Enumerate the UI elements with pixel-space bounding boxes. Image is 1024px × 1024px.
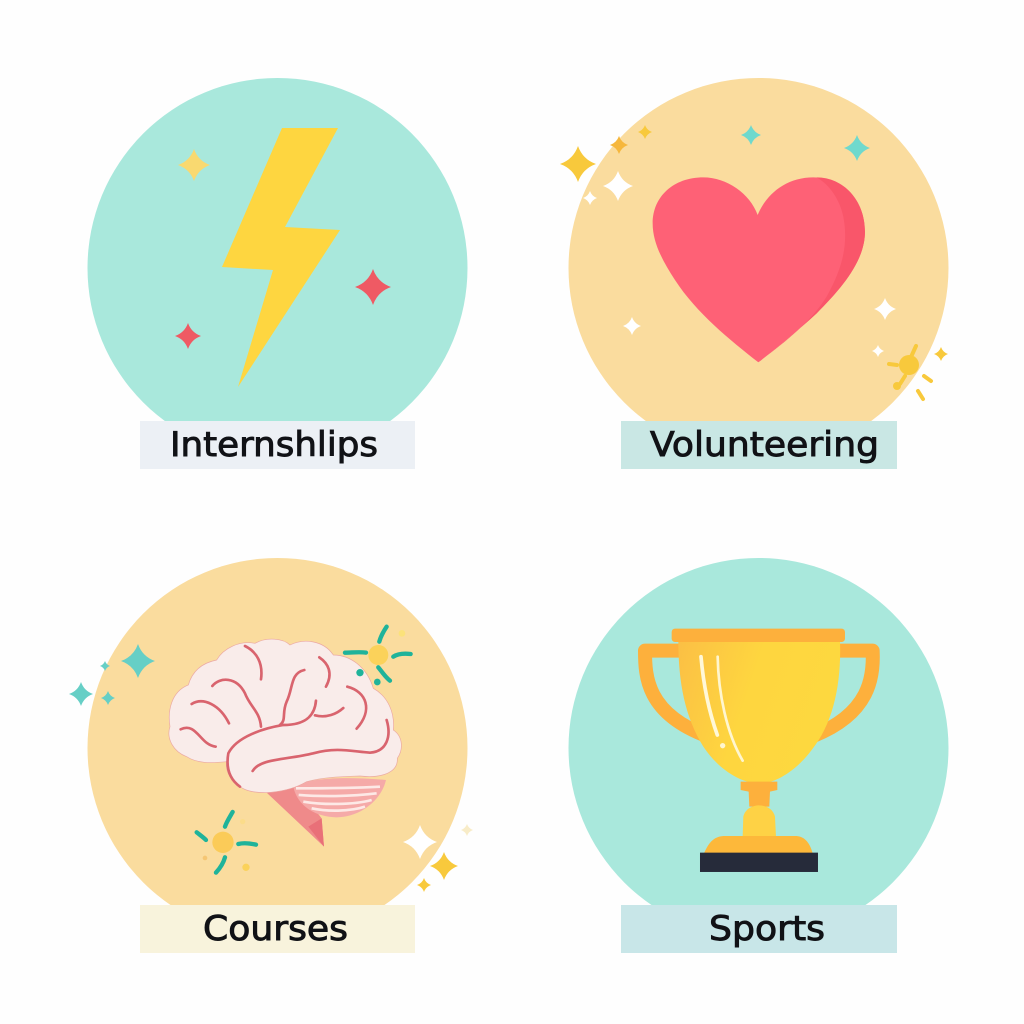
label: internships [140, 421, 415, 469]
panel: courses [69, 558, 473, 953]
panel: internships [88, 78, 468, 469]
trophy rim [672, 629, 845, 642]
icon: teal sparkles [69, 644, 155, 706]
icon: white sparkle [403, 825, 437, 859]
cup highlights [701, 657, 717, 735]
icon: large red sparkle [355, 269, 391, 305]
circle: internships background [88, 78, 468, 458]
icon: yellow sparkle [178, 149, 210, 181]
icon: upper neuron burst [345, 627, 411, 685]
label: volunteering [621, 421, 897, 469]
circle: sports background [568, 558, 948, 938]
trophy stem [741, 782, 777, 807]
panel: sports [568, 558, 948, 953]
icon: teal sparkles [741, 125, 870, 161]
folds [181, 646, 388, 787]
icon: gold burst [889, 346, 931, 399]
icon: small red sparkle [175, 323, 201, 349]
label: courses [140, 905, 415, 953]
trophy cup [678, 640, 840, 784]
circle: volunteering background [568, 78, 948, 458]
icon: lightning bolt [222, 128, 340, 387]
label: internships: Internshlips [170, 425, 378, 464]
label: sports: Sports [709, 909, 825, 948]
icon: white sparkles [583, 171, 896, 357]
icon: trophy [645, 629, 873, 872]
brain stem [267, 787, 324, 847]
trophy base [704, 836, 813, 853]
label: volunteering: Volunteering [650, 425, 879, 464]
label: sports [621, 905, 897, 953]
icon: gold sparkles [417, 824, 473, 892]
icon: lower neuron burst [197, 812, 256, 873]
icon: heart [653, 177, 865, 362]
label: courses: Courses [203, 909, 348, 948]
icon: gold sparkles [560, 125, 948, 361]
cerebrum [169, 639, 401, 793]
trophy handles [645, 651, 707, 736]
circle: courses background [88, 558, 468, 938]
panel: volunteering [560, 78, 948, 469]
icon: brain [169, 639, 401, 847]
cerebellum [293, 778, 386, 817]
